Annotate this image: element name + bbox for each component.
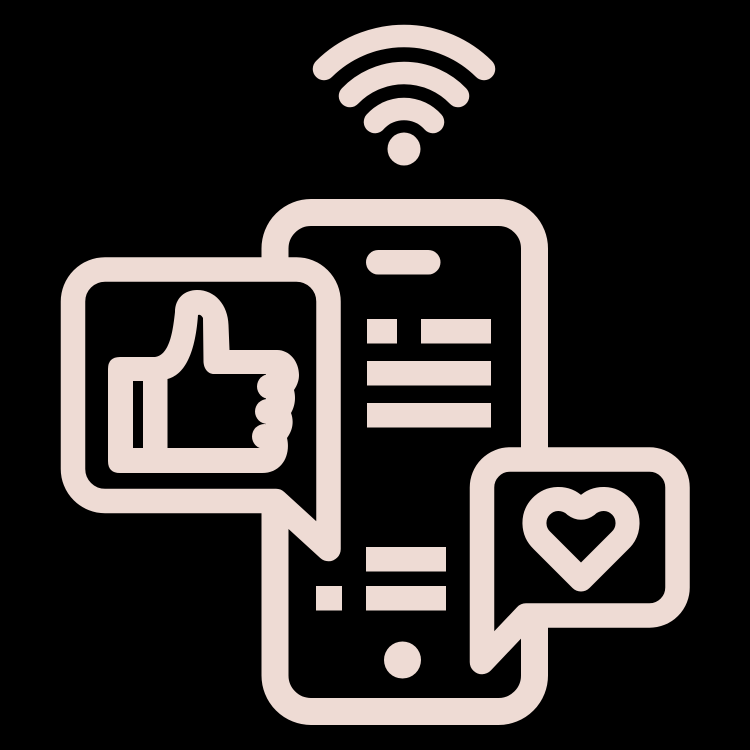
phone lower text lines: [316, 547, 446, 610]
icon: smartphone: [275, 212, 534, 712]
phone upper text lines: [367, 319, 491, 428]
bubble outline: [482, 460, 678, 662]
phone speaker pill: [366, 250, 440, 274]
icon: wifi signal: [324, 36, 484, 166]
phone home button: [384, 642, 421, 678]
speech bubble: thumbs up: [73, 270, 328, 549]
speech bubble: heart: [482, 460, 678, 662]
bubble outline: [73, 270, 328, 549]
finger knuckles: [252, 374, 282, 449]
icon: thumbs up hand: [108, 290, 299, 473]
phone body: [275, 212, 534, 712]
icon: heart: [534, 499, 628, 580]
